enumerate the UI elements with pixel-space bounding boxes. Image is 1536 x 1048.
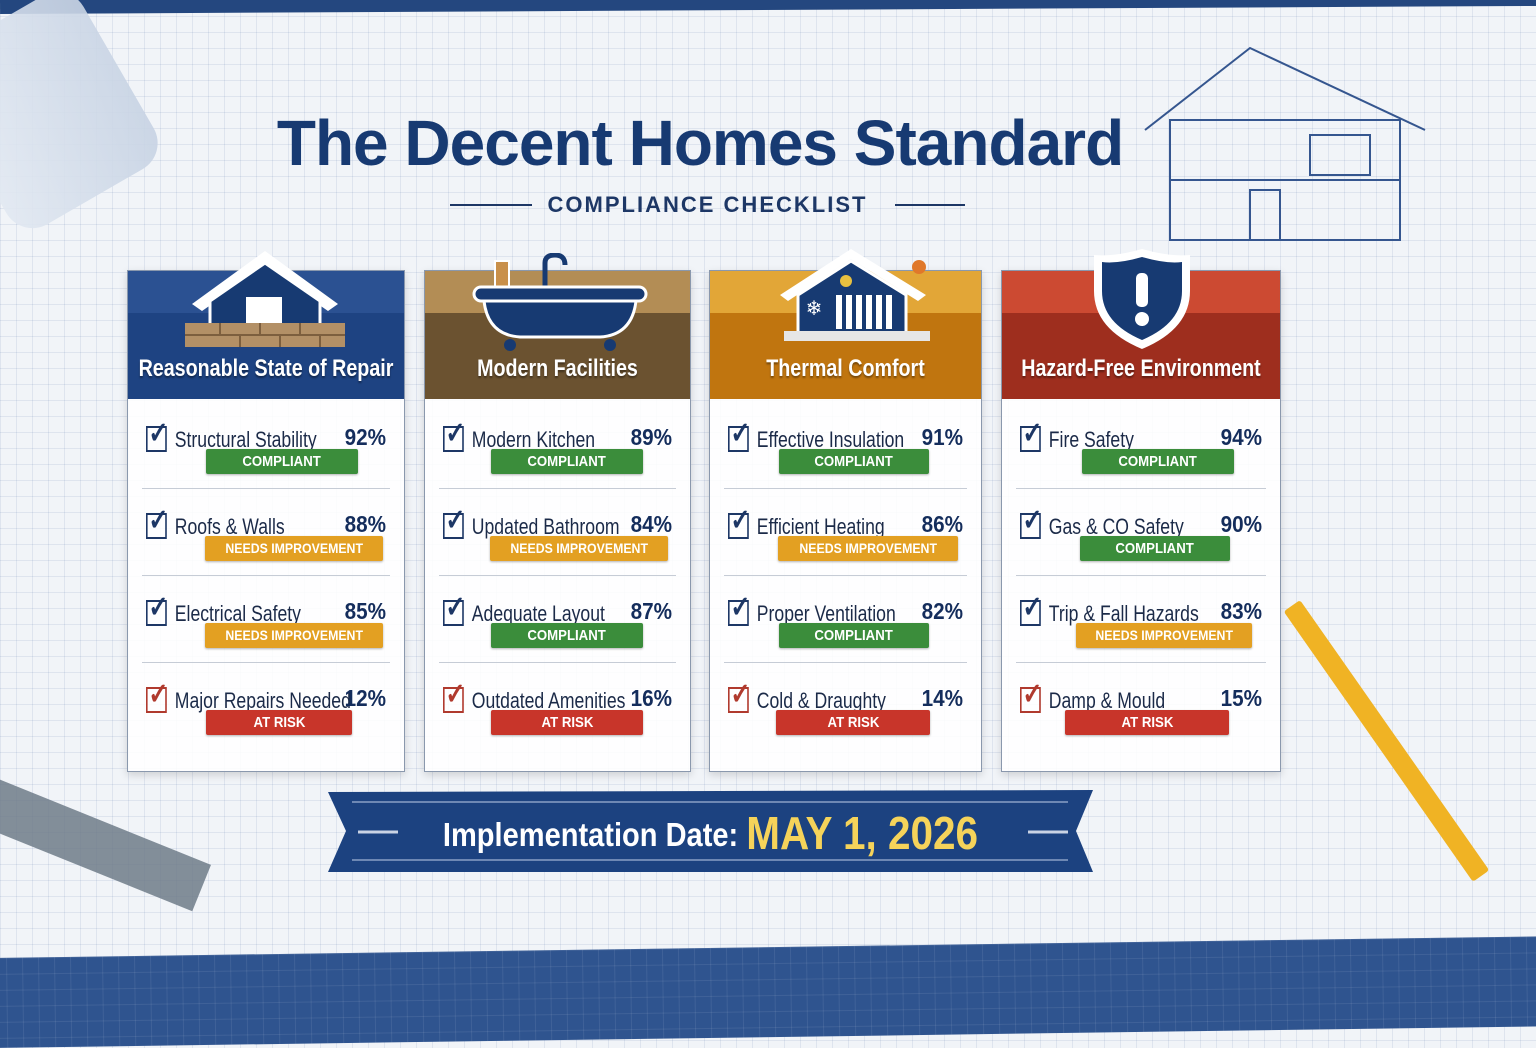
checklist rows	[1016, 424, 1266, 738]
header: facilities: Modern Facilities	[477, 355, 638, 382]
checklist rows: 88%	[345, 511, 386, 537]
blueprint background border top	[0, 0, 1536, 14]
header: hazard: Hazard-Free Environment	[1021, 355, 1261, 382]
checklist rows: Fire Safety	[1049, 427, 1134, 452]
checklist rows: 90%	[1221, 511, 1262, 537]
checklist rows: NEEDS IMPROVEMENT	[1095, 627, 1233, 643]
checklist rows: NEEDS IMPROVEMENT	[225, 627, 363, 643]
checklist rows: NEEDS IMPROVEMENT	[799, 540, 937, 556]
checklist rows: 12%	[345, 685, 386, 711]
checklist rows: 94%	[1221, 424, 1262, 450]
checklist rows: Outdated Amenities	[472, 688, 625, 713]
checklist rows	[142, 424, 390, 738]
banner: implementation date: Implementation Date: MAY 1, 2026	[443, 807, 978, 859]
checklist rows: Trip & Fall Hazards	[1049, 601, 1199, 626]
checklist rows: 86%	[922, 511, 963, 537]
checklist rows: Efficient Heating	[757, 514, 885, 539]
checklist rows: Gas & CO Safety	[1049, 514, 1184, 539]
checklist rows: AT RISK	[253, 714, 305, 731]
checklist rows: Modern Kitchen	[472, 427, 595, 452]
header: repair: Reasonable State of Repair	[139, 355, 393, 382]
checklist rows: 91%	[922, 424, 963, 450]
checklist rows: Structural Stability	[175, 427, 317, 452]
checklist rows: Cold & Draughty	[757, 688, 886, 713]
checklist rows: Proper Ventilation	[757, 601, 896, 626]
title: The Decent Homes Standard	[277, 107, 1123, 179]
panel: Modern Facilities	[424, 270, 691, 772]
checklist rows: Effective Insulation	[757, 427, 904, 452]
header: repair	[128, 271, 404, 399]
checklist rows: NEEDS IMPROVEMENT	[225, 540, 363, 556]
checklist rows: Updated Bathroom	[472, 514, 620, 539]
header: facilities	[425, 271, 690, 399]
checklist rows	[439, 424, 676, 738]
panel: Thermal Comfort	[709, 270, 982, 772]
checklist rows: Adequate Layout	[472, 601, 605, 626]
checklist rows: Electrical Safety	[175, 601, 301, 626]
checklist rows: Major Repairs Needed	[175, 688, 351, 713]
checklist rows	[724, 424, 967, 738]
checklist rows: 16%	[631, 685, 672, 711]
checklist rows: AT RISK	[541, 714, 593, 731]
checklist rows: NEEDS IMPROVEMENT	[510, 540, 648, 556]
header: hazard	[1002, 271, 1280, 399]
decorative ruler bottom left	[0, 779, 211, 911]
icon: heated house	[780, 249, 930, 341]
decorative rolled blueprints	[0, 0, 169, 239]
checklist rows: 92%	[345, 424, 386, 450]
checklist rows: 85%	[345, 598, 386, 624]
icon: shield with exclamation	[1094, 249, 1190, 349]
checklist rows: COMPLIANT	[815, 453, 893, 470]
house sketch top right	[1144, 46, 1426, 241]
checklist rows: 89%	[631, 424, 672, 450]
checklist rows: 84%	[631, 511, 672, 537]
checklist rows: Damp & Mould	[1049, 688, 1165, 713]
checklist rows: COMPLIANT	[528, 453, 606, 470]
banner: implementation date	[328, 790, 1093, 872]
header: thermal: Thermal Comfort	[766, 355, 925, 382]
checklist rows: 15%	[1221, 685, 1262, 711]
checklist rows: Roofs & Walls	[175, 514, 285, 539]
checklist rows: COMPLIANT	[243, 453, 321, 470]
icon: house on bricks	[185, 251, 345, 347]
checklist rows: 14%	[922, 685, 963, 711]
checklist rows: COMPLIANT	[528, 627, 606, 644]
checklist rows: 87%	[631, 598, 672, 624]
blueprint background border bottom	[0, 936, 1536, 1048]
header: thermal	[710, 271, 981, 399]
checklist rows: COMPLIANT	[815, 627, 893, 644]
panel: Hazard-Free Environment	[1001, 270, 1281, 772]
icon: bathtub	[472, 253, 648, 351]
panel: Reasonable State of Repair	[127, 270, 405, 772]
decorative tools: pencil	[1284, 600, 1489, 882]
checklist rows: 82%	[922, 598, 963, 624]
subtitle: COMPLIANCE CHECKLIST	[548, 192, 867, 217]
checklist rows: AT RISK	[827, 714, 879, 731]
checklist rows: COMPLIANT	[1119, 453, 1197, 470]
icon: heated house: ❄	[806, 298, 822, 320]
checklist rows: 83%	[1221, 598, 1262, 624]
checklist rows: AT RISK	[1121, 714, 1173, 731]
checklist rows: COMPLIANT	[1116, 540, 1194, 557]
